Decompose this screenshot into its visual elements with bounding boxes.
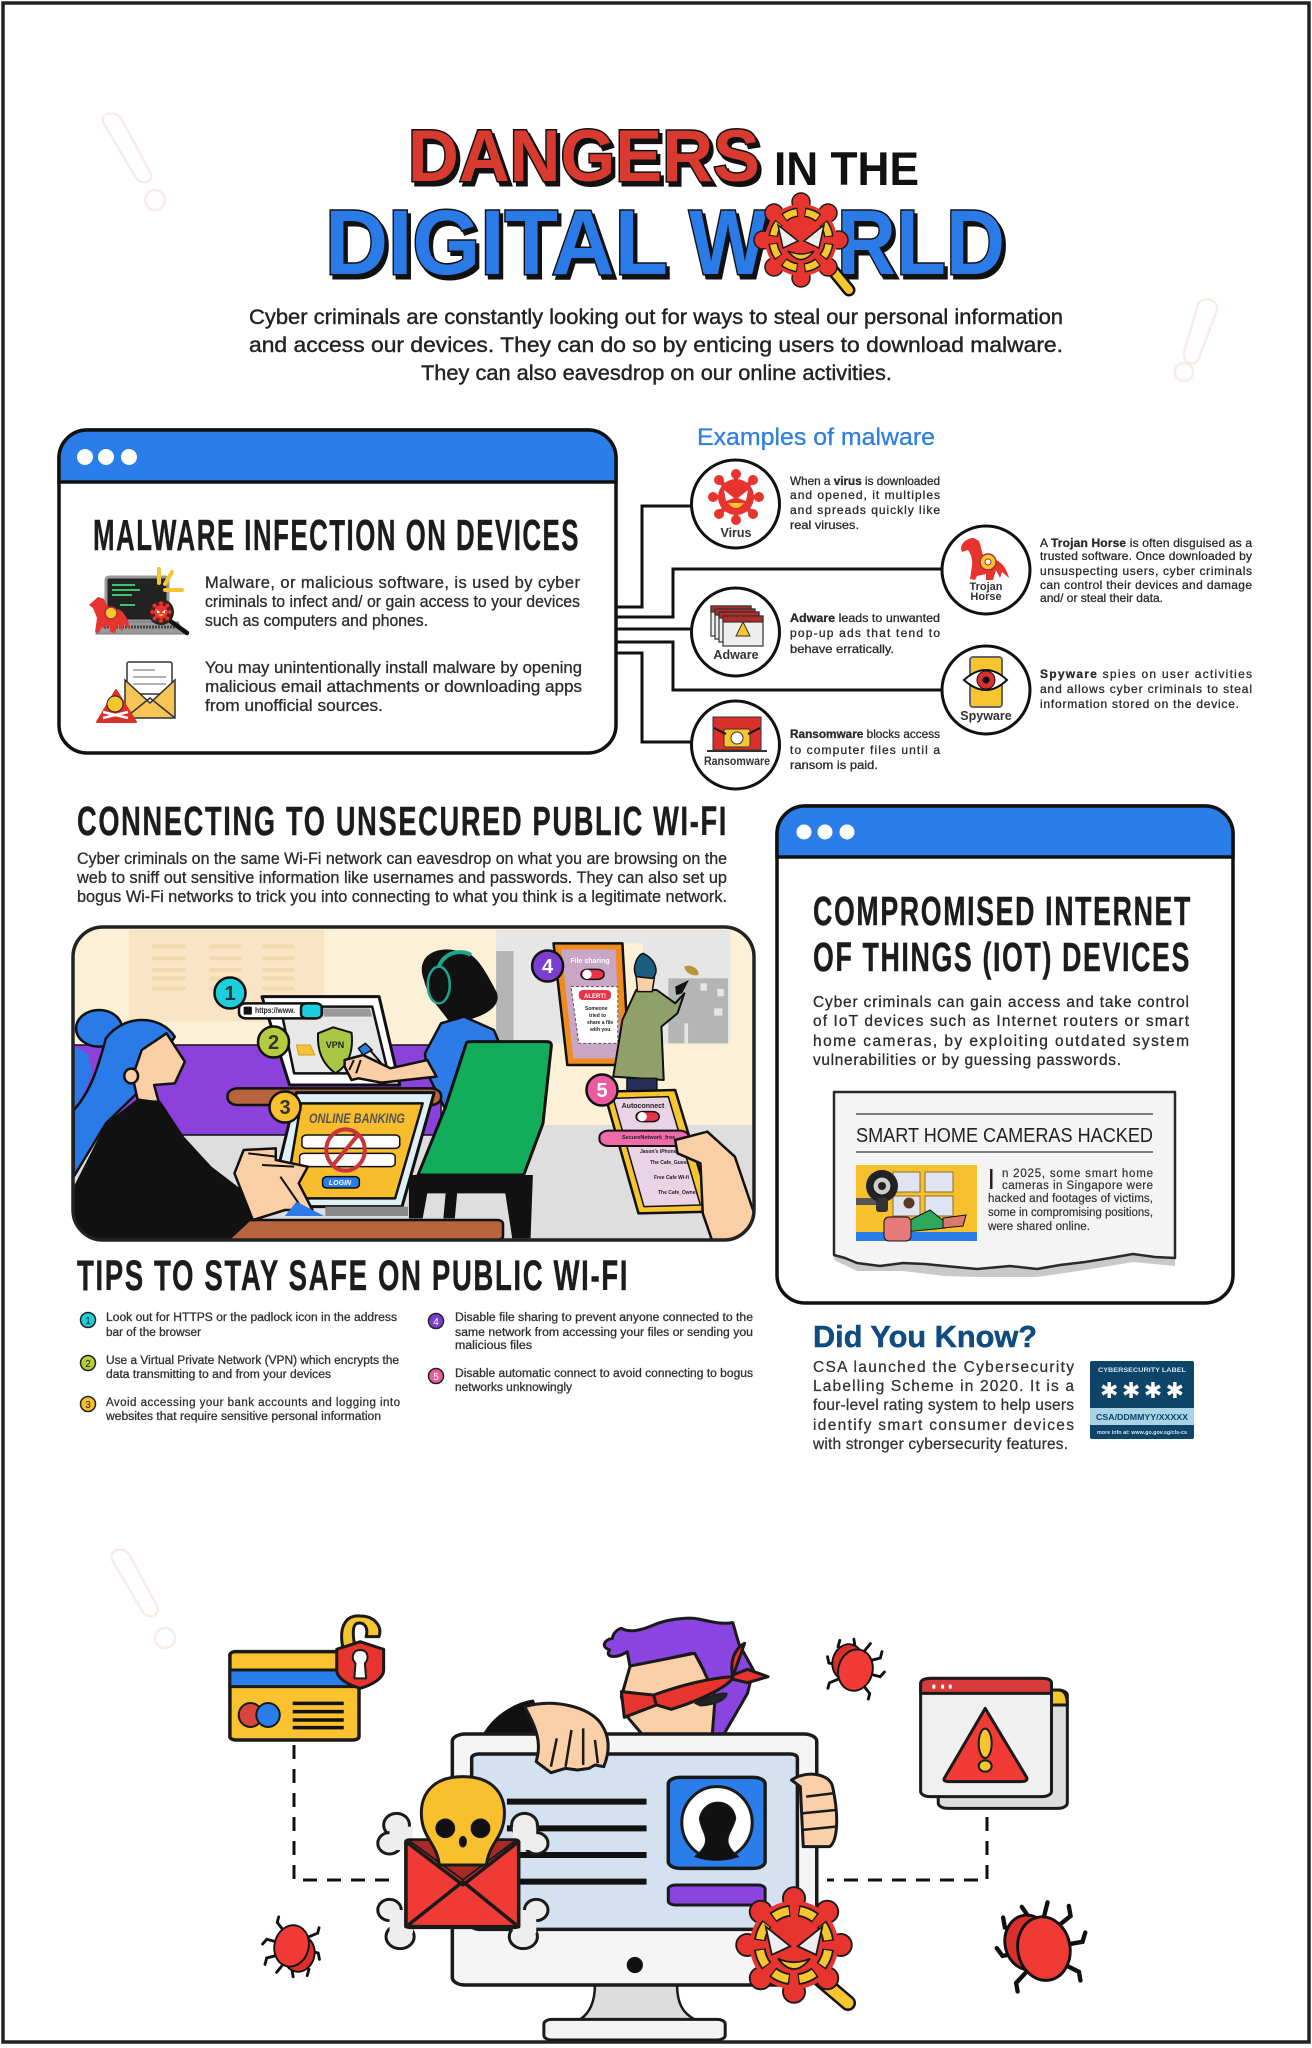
malware: virus [692, 460, 940, 548]
panel: compromised IoT [777, 806, 1233, 1303]
tip 2: data transmitting to and from your devices [106, 1369, 331, 1381]
tip 4: malicious files [455, 1340, 532, 1352]
malware: spyware: information stored on the device. [1040, 697, 1239, 711]
cybersecurity label: ✱✱✱✱ [1100, 1379, 1184, 1404]
newspaper image: hacked cameras [856, 1165, 977, 1241]
panel: malware infection [59, 430, 616, 753]
tip 3: websites that require sensitive personal information [105, 1411, 381, 1423]
dashed connector: card [294, 1745, 395, 1880]
numbered marker 3 [270, 1092, 300, 1122]
text: IoT explanation: vulnerabilities or by guessing passwords. [813, 1052, 1121, 1069]
cybersecurity label: CYBERSECURITY LABEL [1098, 1367, 1186, 1374]
malware: spyware [942, 646, 1252, 734]
malware: ransomware [692, 701, 940, 789]
text: how malware installs [205, 659, 582, 715]
newspaper article: n 2025, some smart home [1002, 1168, 1153, 1180]
text: malware definition: Malware, or malicious software, is used by cyber [205, 574, 580, 592]
title: DANGERS [411, 120, 763, 201]
malware: trojan horse: A Trojan Horse is often disguised as a [1040, 536, 1252, 550]
icon: virus [736, 1887, 852, 2003]
numbered marker 1 [214, 978, 246, 1008]
illustration labels: File sharing [570, 958, 610, 965]
intro text: Cyber criminals are constantly looking out for ways to steal our personal information [249, 306, 1063, 329]
malware: virus: and spreads quickly like [790, 503, 940, 517]
malware: virus: and opened, it multiples [790, 488, 940, 502]
text: IoT explanation: Cyber criminals can gain access and take control [813, 994, 1189, 1011]
heading: did you know: Did You Know? [813, 1319, 1037, 1354]
tip 5 [428, 1368, 753, 1394]
illustration labels: ALERT! [584, 994, 606, 1000]
title: DANGERS [408, 116, 760, 197]
malware: adware: behave erratically. [790, 642, 894, 656]
malware: trojan horse: unsuspecting users, cyber criminals [1040, 564, 1252, 578]
illustration labels: Jason's iPhone [640, 1149, 677, 1155]
tip 4: Disable file sharing to prevent anyone connected to the [455, 1312, 753, 1324]
illustration labels: Free Cafe Wi-fi [654, 1175, 690, 1181]
tip 1 [80, 1312, 397, 1339]
text: did you know [812, 1359, 1074, 1453]
newspaper article: cameras in Singapore were [1002, 1180, 1153, 1192]
illustration: hacker at monitor [230, 1616, 1067, 2040]
intro text: and access our devices. They can do so by enticing users to download malware. [249, 334, 1063, 357]
malware: ransomware: Ransomware blocks access [790, 727, 940, 741]
newspaper clipping [834, 1092, 1175, 1277]
icon: infected laptop [89, 569, 187, 634]
title: W [689, 192, 767, 294]
icon: bug bottom right [990, 1897, 1093, 1994]
title: IN THE [774, 142, 919, 195]
newspaper article: hacked and footages of victims, [988, 1193, 1153, 1205]
numbered marker 5: 5 [596, 1080, 608, 1102]
malware: adware: pop-up ads that tend to [790, 626, 940, 640]
icon: bug bottom left [256, 1915, 327, 1982]
title: W [692, 196, 770, 298]
title: DIGITAL [328, 196, 671, 298]
text: did you know: identify smart consumer devices [813, 1417, 1074, 1434]
illustration: cafe scene [73, 927, 754, 1240]
cybersecurity label: CSA/DDMMYY/XXXXX [1096, 1413, 1189, 1422]
text: malware definition: criminals to infect and/ or gain access to your devices [205, 593, 580, 611]
numbered marker 1: 1 [224, 983, 236, 1005]
text: did you know: four-level rating system to help users [813, 1397, 1074, 1414]
illustration labels: VPN [326, 1040, 344, 1050]
heading: tips: TIPS TO STAY SAFE ON PUBLIC WI-FI [77, 1252, 629, 1300]
text: IoT explanation: of IoT devices such as Internet routers or smart [813, 1013, 1190, 1030]
text: how malware installs: from unofficial sources. [205, 697, 383, 715]
numbered marker 5 [586, 1074, 618, 1106]
connector lines [616, 506, 943, 742]
cybersecurity label: more info at: www.go.gov.sg/cls-cs [1097, 1430, 1187, 1436]
malware: ransomware: to computer files until a [790, 743, 940, 757]
heading: public wifi: CONNECTING TO UNSECURED PUBLIC WI-FI [77, 798, 728, 844]
tip 3: 3 [85, 1400, 91, 1411]
illustration labels: LOGIN [329, 1180, 352, 1187]
text: did you know: Labelling Scheme in 2020. It is a [813, 1378, 1074, 1395]
malware: adware: Adware leads to unwanted [790, 611, 940, 625]
newspaper article: some in compromising positions, [988, 1207, 1153, 1219]
text: how malware installs: You may unintentionally install malware by opening [205, 659, 582, 677]
text: IoT explanation: home cameras, by exploiting outdated system [813, 1033, 1189, 1050]
illustration labels: ONLINE BANKING [309, 1110, 405, 1126]
intro text [249, 306, 1063, 385]
text: malware definition: such as computers and phones. [205, 612, 428, 630]
tip 1: Look out for HTTPS or the padlock icon in the address [106, 1312, 397, 1324]
decorative exclamation marks [103, 113, 1217, 1648]
icon: bug top right [820, 1634, 891, 1701]
text: wifi explanation: Cyber criminals on the same Wi-Fi network can eavesdrop on what you are browsing on the [77, 850, 727, 868]
illustration labels: Autoconnect [622, 1103, 665, 1110]
heading: malware: MALWARE INFECTION ON DEVICES [93, 511, 580, 560]
tip 2: Use a Virtual Private Network (VPN) which encrypts the [106, 1355, 399, 1367]
title: RLD [840, 196, 1008, 298]
malware: trojan horse: and/ or steal their data. [1040, 591, 1163, 605]
malware: trojan horse: can control their devices and damage [1040, 578, 1252, 592]
malware: spyware: and allows cyber criminals to steal [1040, 682, 1252, 696]
title [325, 116, 1008, 298]
malware: ransomware: Ransomware [704, 754, 770, 768]
text: wifi explanation: web to sniff out sensitive information like usernames and passwords. They can also set up [76, 869, 727, 887]
malware: trojan horse [942, 526, 1252, 614]
dashed connector: warning [827, 1817, 987, 1880]
malware: adware: Adware [713, 648, 759, 662]
intro text: They can also eavesdrop on our online activities. [421, 362, 892, 385]
illustration labels: tried to [589, 1013, 606, 1019]
illustration labels: SecureNetwork_free [622, 1135, 675, 1141]
tip 2: 2 [85, 1359, 91, 1370]
numbered marker 4: 4 [542, 956, 554, 978]
malware: ransomware: ransom is paid. [790, 758, 878, 772]
icon: magnifier handle [815, 1975, 848, 2003]
malware: virus: real viruses. [790, 518, 859, 532]
tip 3 [80, 1396, 400, 1423]
numbered marker 2: 2 [268, 1032, 279, 1054]
heading: examples of malware: Examples of malware [697, 424, 935, 451]
malware: virus: Virus [720, 526, 752, 540]
illustration labels: with you [589, 1027, 610, 1033]
malware: trojan horse: Horse [970, 591, 1002, 603]
tip 4 [428, 1312, 753, 1352]
tip 5: networks unknowingly [455, 1382, 572, 1394]
tip 5: 5 [433, 1372, 439, 1383]
numbered marker 2 [258, 1026, 289, 1058]
heading: IoT [813, 888, 1192, 980]
illustration labels: share a file [587, 1020, 613, 1026]
malware: spyware: Spyware spies on user activities [1040, 667, 1252, 681]
numbered marker 3: 3 [279, 1097, 291, 1119]
malware: virus: When a virus is downloaded [790, 474, 940, 488]
tip 1: 1 [85, 1316, 91, 1327]
tip 5: Disable automatic connect to avoid connecting to bogus [455, 1368, 753, 1380]
illustration labels: https://www. [255, 1006, 295, 1015]
malware: spyware: Spyware [960, 709, 1012, 723]
tip 1: bar of the browser [106, 1327, 201, 1339]
text: wifi explanation [76, 850, 727, 906]
tip 2 [80, 1355, 399, 1381]
newspaper article [987, 1168, 1153, 1233]
illustration labels: The Cafe_Owner [658, 1190, 698, 1196]
text: did you know: CSA launched the Cybersecurity [813, 1359, 1074, 1376]
title: RLD [837, 192, 1005, 294]
tip 4: 4 [433, 1317, 439, 1328]
malware: trojan horse: trusted software. Once downloaded by [1040, 549, 1252, 563]
text: malware definition [205, 574, 580, 630]
icon: malicious email [97, 662, 175, 722]
tip 3: Avoid accessing your bank accounts and logging into [106, 1397, 400, 1409]
malware: adware [692, 588, 940, 676]
text: wifi explanation: bogus Wi-Fi networks to trick you into connecting to what you think is a legitimate network. [77, 888, 727, 906]
text: IoT explanation [813, 994, 1190, 1069]
tip 4: same network from accessing your files or sending you [455, 1327, 753, 1339]
text: did you know: with stronger cybersecurity features. [812, 1436, 1068, 1453]
cybersecurity label [1090, 1361, 1194, 1439]
numbered marker 4 [532, 950, 563, 982]
illustration labels [255, 958, 698, 1196]
illustration labels: Someone [585, 1006, 608, 1012]
newspaper clipping: SMART HOME CAMERAS HACKED [856, 1125, 1153, 1147]
illustration labels: The Cafe_Guest [650, 1160, 688, 1166]
text: how malware installs: malicious email attachments or downloading apps [205, 678, 582, 696]
newspaper article: were shared online. [987, 1221, 1090, 1233]
title: DIGITAL [325, 192, 668, 294]
malware: trojan horse: Trojan [969, 581, 1003, 593]
